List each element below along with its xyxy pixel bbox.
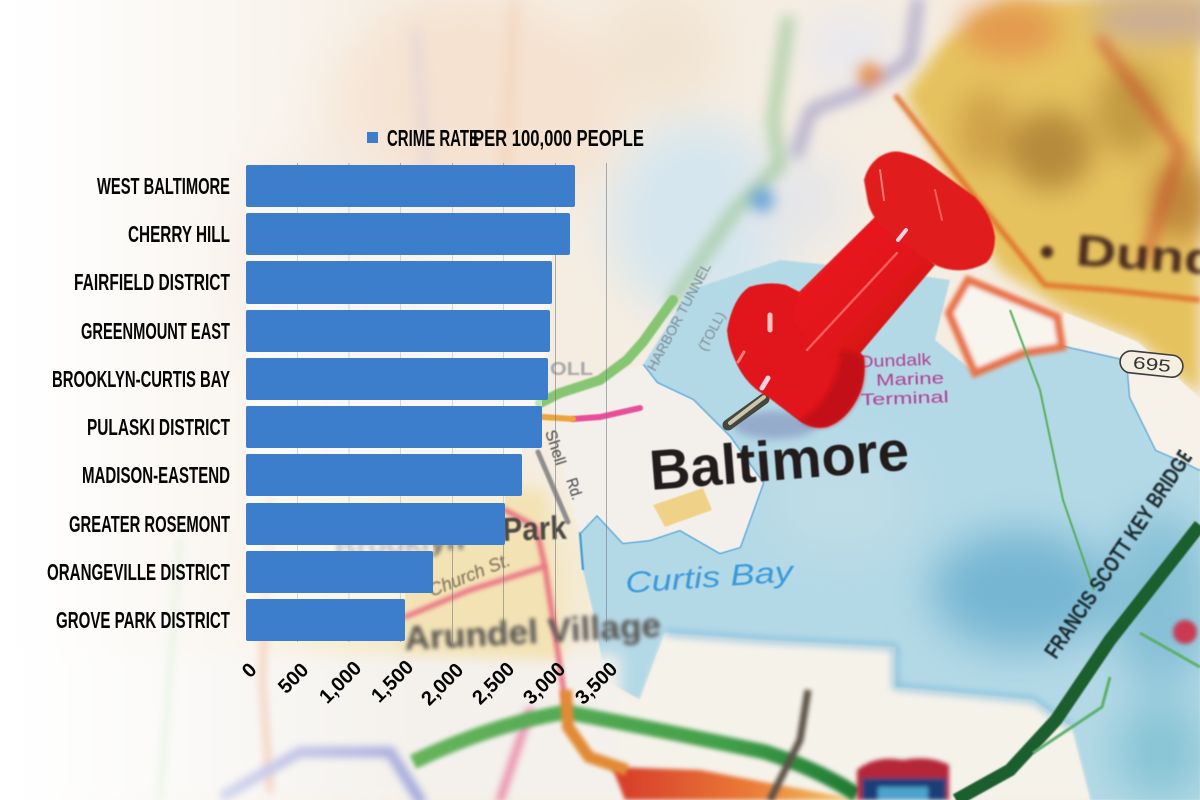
pin needle: [728, 397, 764, 425]
dark green bridge highway: [956, 525, 1200, 800]
x-axis tick labels: 500: [274, 659, 313, 698]
water body: [580, 260, 1200, 800]
map label: Shell Rd: [541, 428, 585, 502]
map label: Dundalk Marine Terminal: Dundalk: [859, 350, 932, 371]
chart gridlines: [298, 163, 606, 642]
map roads near focus: [160, 300, 673, 800]
x-axis tick labels: 1,000: [315, 657, 366, 708]
pin head: [864, 152, 995, 270]
pin shaft: [793, 212, 935, 357]
map label: Harbor Tunnel: HARBOR TUNNEL: [644, 260, 714, 373]
category labels: WEST BALTIMORE: [97, 173, 230, 199]
bars: [246, 165, 575, 641]
x-axis tick labels: 2,000: [417, 659, 468, 710]
map label: Arundel Village: Arundel Village: [403, 607, 662, 658]
map label: Park: Park: [502, 509, 568, 548]
legend: CRIME RATE: [387, 125, 479, 151]
pin highlights: [738, 170, 942, 388]
legend: [367, 125, 644, 151]
bottom coloured wedge: [612, 767, 860, 800]
pin shading: [800, 350, 864, 428]
white left fade: [0, 0, 420, 800]
yellow land block: [905, 0, 1200, 395]
map label: 695 shield: [1119, 350, 1184, 378]
x-axis tick labels: 2,500: [468, 658, 519, 709]
white land patch south-west of pin: [548, 365, 763, 553]
map label: Shell Rd: Shell: [541, 428, 568, 467]
blurred roads upper map: [415, 0, 1180, 300]
map label: Shell Rd: Rd.: [562, 476, 585, 502]
icon: red push pin: [727, 152, 995, 439]
x-axis tick labels: 3,500: [571, 658, 622, 709]
east land strip: [1060, 312, 1200, 470]
yellow city block patch: [653, 488, 712, 527]
category labels: MADISON-EASTEND: [82, 462, 230, 488]
map label: Dundalk Marine Terminal: Marine: [876, 368, 944, 390]
green branch roads: [1033, 633, 1200, 753]
x-axis tick labels: [238, 656, 622, 710]
blurred stick at bottom: [770, 690, 808, 800]
category labels: GREENMOUNT EAST: [81, 318, 230, 344]
category labels: BROOKLYN-CURTIS BAY: [52, 366, 230, 392]
pin shadow: [733, 411, 817, 439]
map label: Church St: Church St.: [426, 550, 513, 601]
red dot: [1173, 620, 1197, 644]
map label: Baltimore: Baltimore: [647, 419, 911, 503]
legend: PER 100,000 PEOPLE: [473, 125, 644, 151]
map label: 695 shield: 695: [1132, 353, 1172, 376]
category labels: FAIRFIELD DISTRICT: [74, 269, 230, 295]
map label: toll: OLL: [550, 359, 593, 379]
x-axis tick labels: 0: [238, 659, 261, 682]
category labels: GREATER ROSEMONT: [69, 511, 230, 537]
green highway: [413, 712, 857, 795]
orange road: [566, 690, 627, 770]
map label: Curtis Bay: Curtis Bay: [624, 555, 796, 600]
bar chart: crime rate per 100,000 people: [47, 125, 644, 710]
map label: Dundalk Marine Terminal: Terminal: [860, 387, 949, 409]
category labels: [47, 173, 230, 633]
south land masses: [0, 633, 1090, 800]
x-axis tick labels: 3,000: [519, 658, 570, 709]
far blurred land and upper map: [210, 0, 1200, 690]
shoreline: [580, 365, 763, 570]
map label: Brooklyn faint: Brooklyn: [334, 528, 465, 562]
map label: Dundalk Marine Terminal: [859, 349, 949, 409]
category labels: GROVE PARK DISTRICT: [56, 607, 230, 633]
category labels: CHERRY HILL: [128, 221, 230, 247]
category labels: ORANGEVILLE DISTRICT: [47, 559, 230, 585]
orange road near yellow land: [895, 95, 1200, 300]
interstate shield: [857, 758, 949, 800]
land blotches: [957, 0, 1200, 240]
pin base: [727, 283, 864, 428]
terminal outline shape: [949, 280, 1062, 373]
green boundary line: [1010, 310, 1094, 590]
map label: Harbor Tunnel: (TOLL): [695, 309, 728, 353]
pale bands between bars: [246, 207, 570, 599]
sandy district: [385, 490, 562, 660]
category labels: PULASKI DISTRICT: [87, 414, 230, 440]
x-axis tick labels: 1,500: [367, 656, 418, 707]
